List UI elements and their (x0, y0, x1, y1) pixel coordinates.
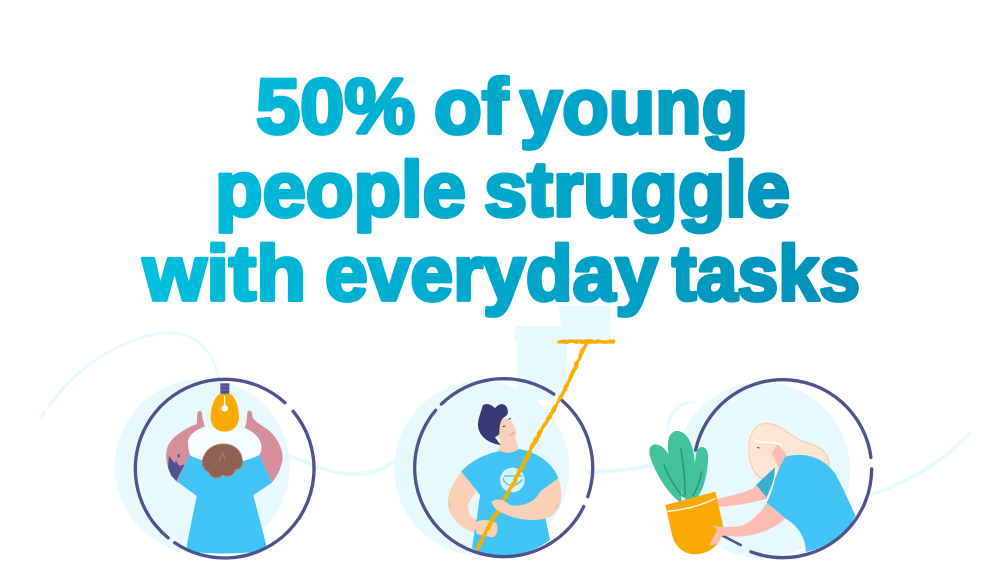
ring (99, 343, 351, 580)
shirt logo (500, 468, 525, 492)
background bottle shape (514, 306, 611, 400)
illustration: person changing a light bulb (99, 343, 351, 580)
ring (378, 342, 629, 580)
arm right (492, 478, 561, 520)
pale circle backdrop (394, 381, 569, 556)
sleeve far (756, 467, 775, 497)
shirt (461, 449, 558, 556)
title: with (142, 229, 306, 317)
watch/sleeve mark on arm (168, 454, 185, 481)
title: 50% (256, 62, 415, 150)
icon: squeegee pole (477, 341, 613, 549)
illustration: person carrying a potted plant (649, 379, 872, 558)
neck (772, 444, 787, 470)
hair (478, 404, 508, 445)
hand lower (474, 520, 498, 537)
title: struggle (484, 145, 790, 233)
pale circle backdrop (115, 379, 290, 554)
face details (503, 418, 515, 435)
neck (498, 435, 519, 454)
leaf veins (664, 448, 702, 497)
hair (749, 423, 829, 480)
pale circle backdrop (674, 382, 850, 558)
illustration: person holding a squeegee pole (378, 341, 629, 580)
pot (665, 492, 723, 554)
face (757, 442, 776, 457)
title (142, 62, 860, 317)
title: of (434, 62, 509, 150)
title: people (215, 145, 466, 233)
arm left (448, 471, 481, 534)
shirt (177, 455, 272, 554)
title: young (520, 62, 748, 150)
arm near (709, 503, 785, 545)
title: tasks (672, 229, 860, 317)
ring (693, 379, 872, 558)
plant leaves (649, 431, 708, 503)
arm far (715, 486, 768, 507)
icon: light bulb (211, 383, 239, 432)
white space between arms (187, 427, 261, 463)
title: everyday (325, 229, 658, 317)
shirt (767, 455, 855, 552)
hair (202, 444, 243, 478)
head (497, 419, 516, 441)
arms (166, 411, 283, 483)
background swirl lines (42, 333, 969, 495)
